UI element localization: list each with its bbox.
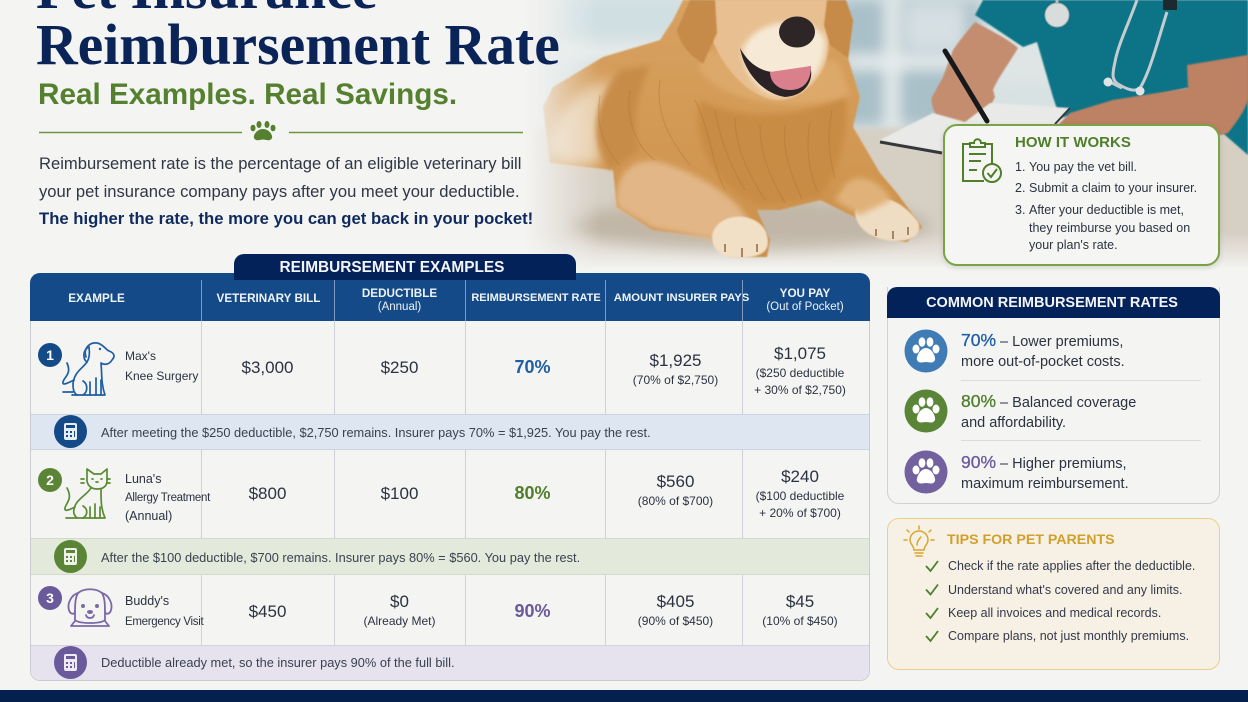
text: REIMBURSEMENT RATE [471,292,601,304]
rate item 80% [904,390,1136,432]
row 2: Luna: $240 [781,467,819,486]
example name [125,472,210,523]
tips checklist: Check if the rate applies after the deductible. [948,559,1195,573]
heading: tips: TIPS FOR PET PARENTS [947,532,1115,548]
text: maximum reimbursement. [961,476,1129,492]
panel: how it works: 1. [1015,160,1025,174]
example name: Emergency Visit [125,616,203,628]
text: (Annual) [378,301,421,313]
row 3: Buddy: (90% of $450) [638,614,713,628]
row 2: Luna: + 20% of $700) [759,506,841,520]
text: DEDUCTIBLE [362,287,437,300]
text [961,330,1125,370]
note text: After the $100 deductible, $700 remains. Insurer pays 80% = $560. You pay the rest. [101,550,580,565]
badge 2 [38,468,62,492]
example name [125,594,204,628]
panel: how it works: You pay the vet bill. [1029,160,1137,174]
row 3: Buddy: 90% [514,601,551,621]
note 2 [31,538,869,575]
note 1 [31,414,869,450]
example name [125,349,198,383]
text: AMOUNT INSURER PAYS [614,292,749,304]
subtitle: Real Examples. Real Savings. [38,78,457,111]
panel: how it works: your plan's rate. [1029,238,1118,252]
note text: Deductible already met, so the insurer pays 90% of the full bill. [101,655,455,670]
badge 3: 3 [46,590,54,606]
row 2: Luna [38,467,844,523]
row 1: Max: + 30% of $2,750) [754,383,846,397]
panel: how it works [943,124,1220,266]
badge 1 [38,343,62,367]
example name: Luna's [125,472,161,486]
badge 3 [38,586,62,610]
example name: Buddy's [125,594,169,608]
row 2: Luna: $100 [381,484,418,503]
row 1: Max: ($250 deductible [756,366,844,380]
row 2: Luna: $560 [657,472,694,491]
dog [543,0,930,258]
values: $450 [249,602,286,621]
intro text [39,154,533,228]
text: more out-of-pocket costs. [961,354,1125,370]
table header bar [30,273,870,321]
panel: how it works: Submit a claim to your insurer. [1029,181,1197,195]
text: and affordability. [961,415,1066,431]
row 1: Max [38,342,846,397]
panel: how it works: 3. [1015,203,1025,217]
icon: calculator [54,646,87,679]
icon: paw green [904,390,948,432]
icon: puppy face [68,588,112,627]
heading tab: reimbursement examples: REIMBURSEMENT EXAMPLES [280,259,504,276]
values: $800 [249,484,286,503]
text: 70% – Lower premiums, [961,330,1123,350]
row 2: Luna: (80% of $700) [638,494,713,508]
row 3: Buddy: (Already Met) [363,614,436,628]
row 1: Max: $250 [381,358,418,377]
text [961,452,1129,492]
table panel: reimbursement examples [30,273,870,681]
example name: Allergy Treatment [125,492,210,504]
text: VETERINARY BILL [217,292,320,305]
heading bar [887,287,1220,318]
heading: how it works: HOW IT WORKS [1015,134,1131,151]
intro text: Reimbursement rate is the percentage of an eligible veterinary bill [39,154,521,173]
row 3: Buddy: $405 [657,592,694,611]
row 2: Luna: ($100 deductible [756,489,844,503]
rate item 90% [904,450,1129,494]
icon: calculator [54,415,87,448]
text [961,391,1136,431]
divider with paw [39,121,523,140]
example name: (Annual) [125,509,172,523]
title: Reimbursement Rate [36,14,560,77]
hero photo: golden retriever and vet [537,0,1248,264]
column headers: EXAMPLE [68,292,125,305]
panel: how it works: After your deductible is met, [1029,203,1184,217]
badge 2: 2 [46,472,54,488]
text: (Out of Pocket) [766,301,844,313]
icon: paw blue [904,330,948,372]
heading tab: reimbursement examples [234,254,576,280]
tips checklist [925,559,1195,643]
icon: light bulb [903,525,935,557]
text: 90% – Higher premiums, [961,452,1127,472]
values: $3,000 [242,358,294,377]
tips checklist: Keep all invoices and medical records. [948,606,1161,620]
icon: dog [62,342,115,396]
row 1: Max: $1,925 [650,351,702,370]
steps [1015,160,1197,252]
rate item 70% [904,330,1125,372]
panel: common reimbursement rates [887,287,1220,504]
row 1: Max: $1,075 [774,344,826,363]
row 1: Max: (70% of $2,750) [633,373,718,387]
panel: tips for pet parents [887,518,1220,670]
intro text: The higher the rate, the more you can get back in your pocket! [39,209,533,228]
badge 1: 1 [46,347,54,363]
intro text: your pet insurance company pays after you meet your deductible. [39,182,520,200]
row 3: Buddy: $45 [786,592,814,611]
note text: After meeting the $250 deductible, $2,750 remains. Insurer pays 70% = $1,925. You pay the rest. [101,425,651,440]
example name: Max's [125,349,156,363]
panel: how it works: 2. [1015,181,1025,195]
icon: calculator [54,540,87,573]
panel: how it works: they reimburse you based on [1029,221,1190,235]
text: YOU PAY [780,287,830,300]
row 3: Buddy: (10% of $450) [762,614,838,628]
vet [880,0,1248,155]
row 3: Buddy: $0 [390,592,409,611]
tips checklist: Compare plans, not just monthly premiums. [948,629,1189,643]
tips checklist: Understand what's covered and any limits. [948,583,1182,597]
icon: paw purple [904,450,948,494]
heading bar: COMMON REIMBURSEMENT RATES [926,295,1178,311]
icon: clipboard check [962,138,1002,183]
example name: Knee Surgery [125,369,198,383]
row 3: Buddy [38,586,838,628]
row 1: Max: 70% [514,357,551,377]
note 3 [31,645,869,680]
footer bar [0,690,1248,702]
icon: cat [64,468,111,519]
text: 80% – Balanced coverage [961,391,1136,411]
row 2: Luna: 80% [514,483,551,503]
